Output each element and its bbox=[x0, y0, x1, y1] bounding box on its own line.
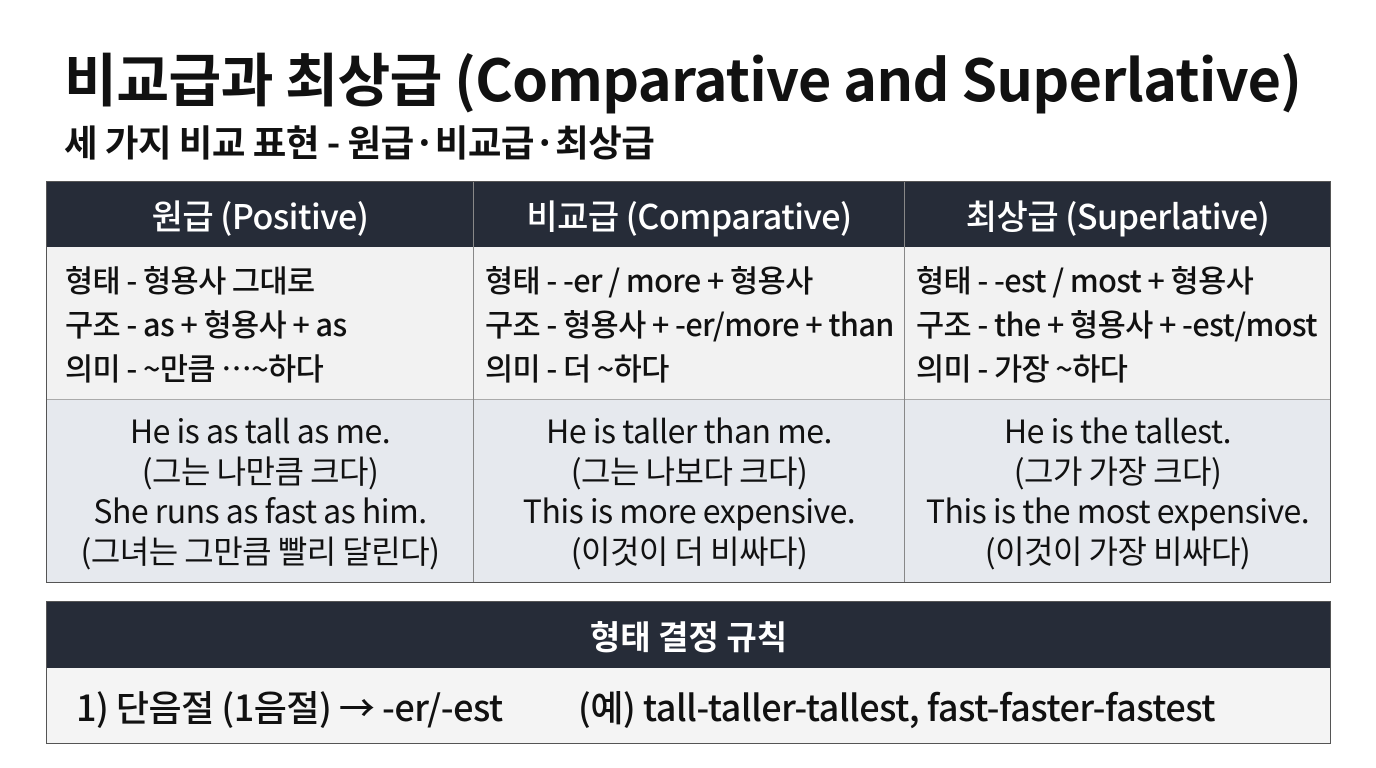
rules: positive: 구조 - as + 형용사 + as bbox=[65, 301, 347, 345]
rules: superlative: 의미 - 가장 ~하다 bbox=[916, 345, 1127, 389]
title: 비교급과 최상급 (Comparative and Superlative) bbox=[64, 34, 1301, 118]
examples: superlative bbox=[905, 400, 1330, 582]
examples: superlative: He is the tallest. bbox=[1004, 407, 1231, 453]
comparison table bbox=[46, 181, 1331, 583]
rules: superlative: 구조 - the + 형용사 + -est/most bbox=[916, 301, 1317, 345]
subtitle: 세 가지 비교 표현 - 원급·비교급·최상급 bbox=[64, 114, 654, 167]
rules: comparative: 의미 - 더 ~하다 bbox=[485, 345, 669, 389]
examples: positive: (그녀는 그만큼 빨리 달린다) bbox=[80, 527, 439, 573]
examples: comparative: (이것이 더 비싸다) bbox=[571, 527, 807, 573]
header: comparative: 비교급 (Comparative) bbox=[526, 190, 852, 239]
rule 1 bbox=[47, 668, 1330, 743]
header: comparative bbox=[474, 182, 904, 247]
rule 1: (예) tall-taller-tallest, fast-faster-fastest bbox=[578, 680, 1215, 732]
column: comparative bbox=[473, 182, 904, 582]
examples: positive: She runs as fast as him. bbox=[93, 487, 427, 533]
header: positive: 원급 (Positive) bbox=[152, 190, 368, 239]
examples: positive: (그는 나만큼 크다) bbox=[142, 447, 378, 493]
panel: form rules bbox=[46, 601, 1331, 744]
examples: comparative: He is taller than me. bbox=[546, 407, 832, 453]
column: positive bbox=[47, 182, 473, 582]
heading: form rules bbox=[47, 602, 1330, 668]
rules: superlative: 형태 - -est / most + 형용사 bbox=[916, 257, 1253, 301]
examples: superlative: (그가 가장 크다) bbox=[1014, 447, 1221, 493]
rules: comparative bbox=[474, 247, 904, 400]
rules: comparative: 구조 - 형용사 + -er/more + than bbox=[485, 301, 894, 345]
rules: comparative: 형태 - -er / more + 형용사 bbox=[485, 257, 813, 301]
examples: comparative: This is more expensive. bbox=[523, 487, 855, 533]
header: superlative: 최상급 (Superlative) bbox=[966, 190, 1269, 239]
rules: positive: 형태 - 형용사 그대로 bbox=[65, 257, 315, 301]
heading: form rules: 형태 결정 규칙 bbox=[590, 611, 787, 659]
examples: superlative: (이것이 가장 비싸다) bbox=[985, 527, 1250, 573]
rules: positive bbox=[47, 247, 473, 400]
examples: comparative bbox=[474, 400, 904, 582]
examples: positive bbox=[47, 400, 473, 582]
rules: positive: 의미 - ~만큼 …~하다 bbox=[65, 345, 323, 389]
header: positive bbox=[47, 182, 473, 247]
rules: superlative bbox=[905, 247, 1330, 400]
header: superlative bbox=[905, 182, 1330, 247]
rule 1: 1) 단음절 (1음절) → -er/-est bbox=[76, 680, 503, 732]
column: superlative bbox=[904, 182, 1330, 582]
examples: comparative: (그는 나보다 크다) bbox=[571, 447, 807, 493]
examples: positive: He is as tall as me. bbox=[130, 407, 390, 453]
examples: superlative: This is the most expensive. bbox=[926, 487, 1309, 533]
